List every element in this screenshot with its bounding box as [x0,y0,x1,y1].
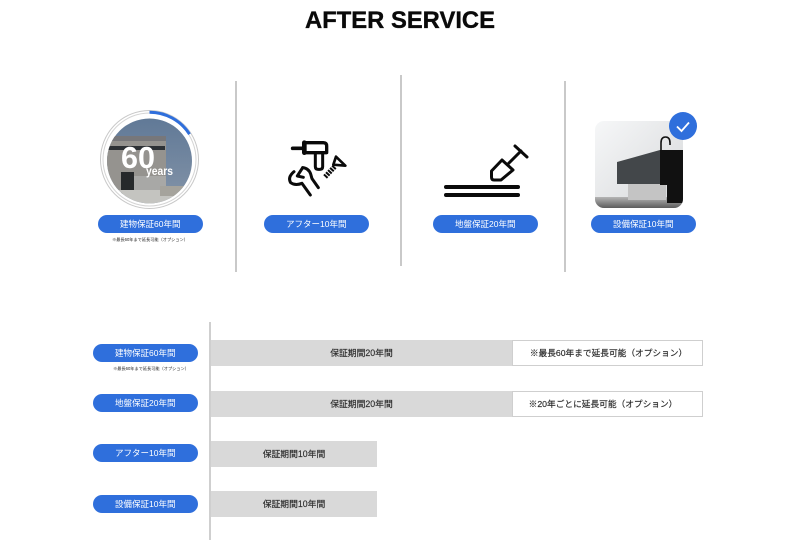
bar: building 20 years [211,340,512,366]
title: AFTER SERVICE [305,7,495,34]
bar: equipment 10 years: 保証期間10年間 [263,499,325,509]
row footnote: ※最長60年まで延長可能（オプション） [113,366,189,371]
label pill [264,215,368,233]
icon: 60 years house photo dial: years [146,166,173,178]
bar: equipment 10 years [211,491,377,517]
row label: equipment [93,495,198,513]
bar: building 20 years: 保証期間20年間 [330,348,393,358]
bar: ground 20 years: 保証期間20年間 [330,399,393,409]
chart: warranty timeline [93,322,703,540]
option box: up to 60 years: ※最長60年まで延長可能（オプション） [530,348,687,358]
icon: kitchen photo with check badge [595,112,697,208]
row label: after-service [93,444,198,462]
label pill: 地盤保証20年間 [455,219,515,229]
divider lines [235,75,566,272]
option box: every 20 years [512,391,703,417]
row label: after-service: アフター10年間 [115,448,175,458]
label pill: アフター10年間 [286,219,346,229]
footnote: ※最長60年まで延長可能（オプション） [112,237,188,242]
chart axis [209,322,211,540]
row label: building [93,344,198,362]
panel: ground warranty 20 years [433,144,538,233]
bar: after-service 10 years: 保証期間10年間 [263,449,325,459]
icon: 60 years house photo dial: 60 [121,140,155,175]
row label: ground [93,394,198,412]
icon: 60 years house photo dial [100,110,199,209]
row label: building: 建物保証60年間 [115,348,175,358]
panel: equipment warranty 10 years [591,112,697,233]
option box: every 20 years: ※20年ごとに延長可能（オプション） [529,399,677,409]
label pill [433,215,538,233]
bar: ground 20 years [211,391,512,417]
panel: building warranty 60 years [98,110,203,242]
label pill: 建物保証60年間 [120,219,180,229]
icon: drill wrench screw [288,140,347,197]
option box: up to 60 years [512,340,703,366]
panel: after-service 10 years [264,140,369,233]
icon: shovel and ground [444,144,529,197]
bar: after-service 10 years [211,441,377,467]
label pill [98,215,202,233]
label pill [591,215,696,233]
row label: equipment: 設備保証10年間 [115,499,175,509]
label pill: 設備保証10年間 [613,219,673,229]
row label: ground: 地盤保証20年間 [115,398,175,408]
